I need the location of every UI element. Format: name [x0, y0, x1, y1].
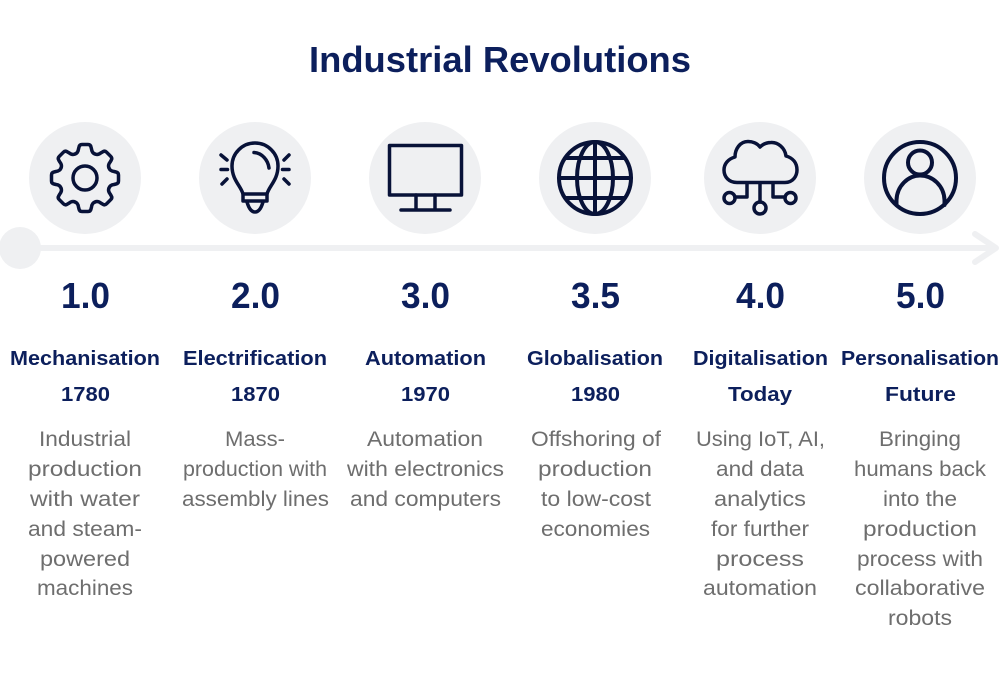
column: 3.0 Automation [346, 122, 504, 511]
version number: 3.0 [401, 275, 450, 316]
version number: 2.0 [231, 275, 280, 316]
heading: Digitalisation [693, 348, 828, 370]
version number: 5.0 [896, 275, 945, 316]
column: 4.0 Digitalisation [693, 122, 828, 600]
column: 2.0 Electrification [182, 122, 329, 511]
description: process [716, 548, 804, 571]
date: 1980 [571, 384, 620, 406]
icon: globe [539, 122, 651, 234]
description: Automation [367, 428, 483, 451]
description: with water [29, 488, 140, 511]
heading: Mechanisation [10, 348, 160, 370]
description: Industrial [39, 428, 131, 451]
icon: gear [29, 122, 141, 234]
description: automation [703, 577, 817, 600]
description: Mass- [225, 428, 285, 451]
description: robots [888, 607, 952, 630]
timeline arrow [0, 227, 996, 269]
title: Industrial Revolutions [309, 39, 691, 80]
description: for further [711, 518, 809, 541]
column: 3.5 Globalisation [527, 122, 663, 541]
version number: 3.5 [571, 275, 620, 316]
version number: 4.0 [736, 275, 785, 316]
date: 1970 [401, 384, 450, 406]
description: production with [183, 458, 327, 481]
date: 1870 [231, 384, 280, 406]
description: with electronics [346, 458, 504, 481]
description: machines [37, 577, 133, 600]
description [346, 428, 504, 511]
description: production [863, 518, 977, 541]
heading: Globalisation [527, 348, 663, 370]
heading: Electrification [183, 348, 327, 370]
description [696, 428, 825, 600]
description: and steam- [28, 518, 142, 541]
description: Using IoT, AI, [696, 428, 825, 451]
description: Bringing [879, 428, 961, 451]
version number: 1.0 [61, 275, 110, 316]
icon: light bulb [199, 122, 311, 234]
icon: computer monitor [369, 122, 481, 234]
column: 5.0 Personalisation [841, 122, 999, 630]
heading: Personalisation [841, 348, 999, 370]
column: 1.0 Mechanisation [10, 122, 160, 600]
description [854, 428, 987, 630]
icon: cloud network [704, 122, 816, 234]
description [28, 428, 142, 600]
description: production [28, 458, 142, 481]
description: and computers [350, 488, 501, 511]
description: into the [883, 488, 957, 511]
description: humans back [854, 458, 987, 481]
description: process with [857, 548, 983, 571]
description: production [538, 458, 652, 481]
description: and data [716, 458, 804, 481]
date: Today [728, 384, 793, 406]
description: collaborative [855, 577, 985, 600]
description [182, 428, 329, 511]
date: Future [885, 384, 956, 406]
icon: person [864, 122, 976, 234]
heading: Automation [365, 348, 486, 370]
description: assembly lines [182, 488, 329, 511]
description: Offshoring of [531, 428, 661, 451]
description [531, 428, 661, 541]
description: economies [541, 518, 650, 541]
date: 1780 [61, 384, 110, 406]
description: to low-cost [541, 488, 651, 511]
description: analytics [714, 488, 806, 511]
description: powered [40, 548, 130, 571]
